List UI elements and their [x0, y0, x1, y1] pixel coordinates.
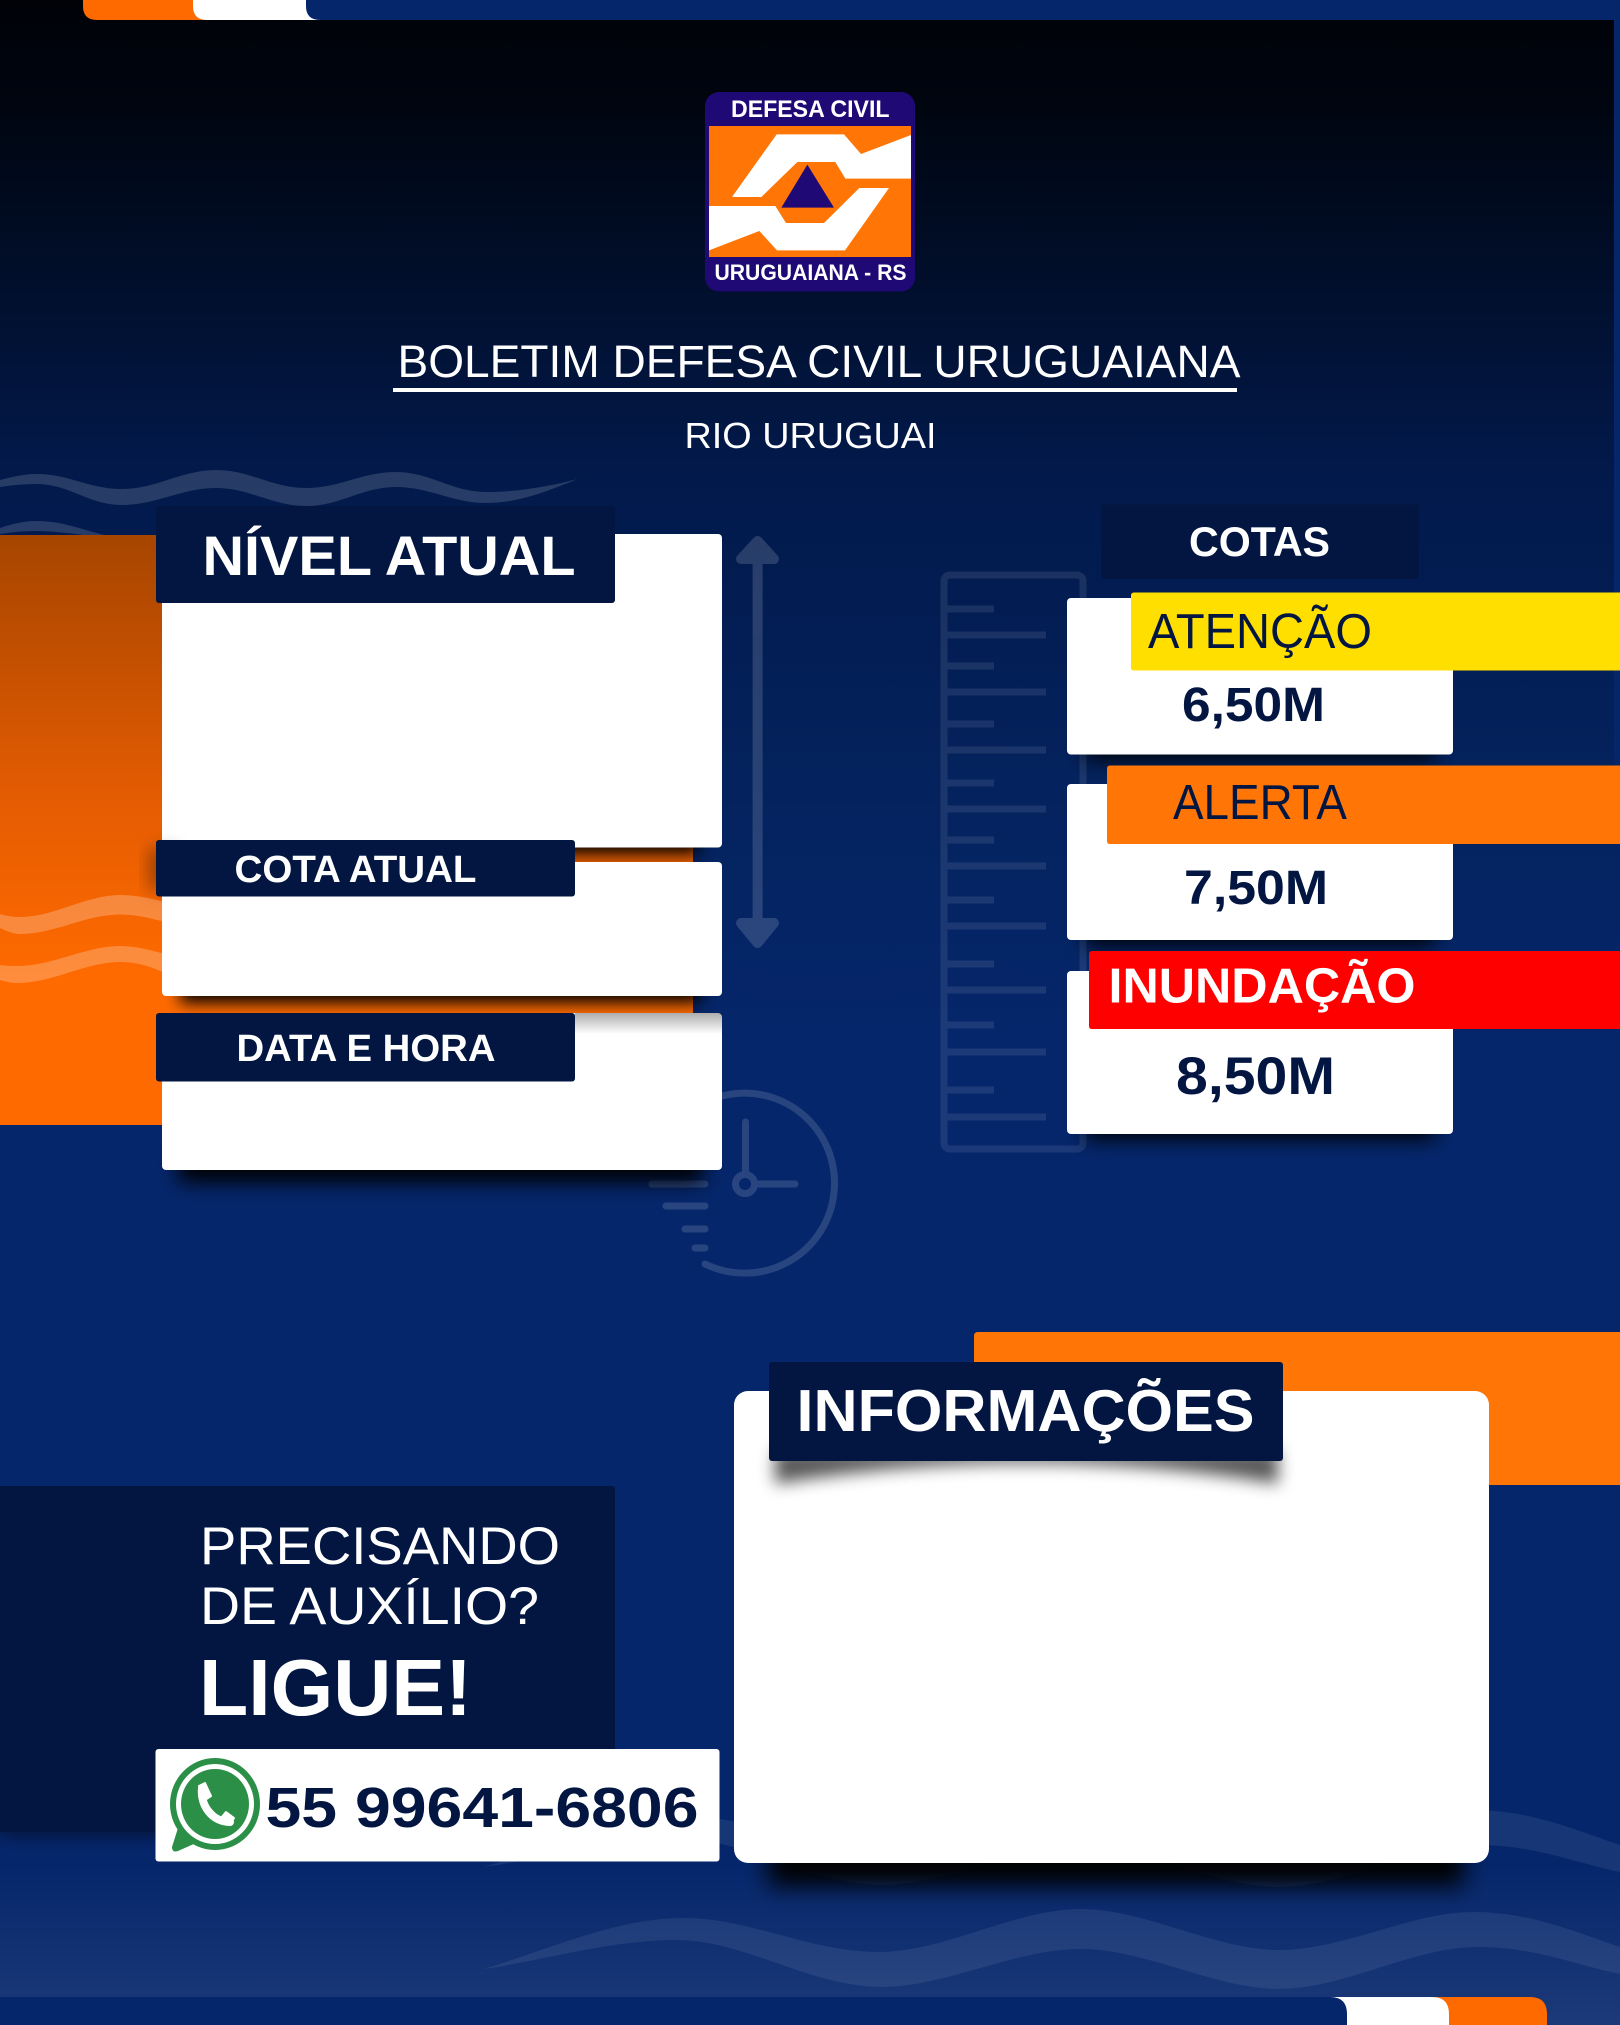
logo: defesa civil: URUGUAIANA - RS — [714, 260, 906, 285]
wave: on orange block — [0, 895, 165, 983]
heading: informações — [769, 1362, 1283, 1461]
orange block: informações — [974, 1332, 1620, 1485]
heading: nível atual — [156, 506, 615, 603]
heading: cotas: COTAS — [1189, 518, 1330, 565]
heading: cota atual: COTA ATUAL — [234, 849, 476, 891]
card: atenção — [1067, 592, 1620, 759]
card: atenção: 6,50M — [1182, 679, 1325, 732]
bottom stripe bar — [0, 1997, 1547, 2025]
card: inundação: INUNDAÇÃO — [1108, 960, 1416, 1014]
icon: ruler — [944, 575, 1083, 1149]
heading: data e hora: DATA E HORA — [236, 1028, 496, 1070]
icon: clock — [652, 1093, 835, 1273]
card: alerta: 7,50M — [1184, 862, 1328, 915]
panel: cota atual — [148, 840, 722, 1003]
card: atenção: ATENÇÃO — [1148, 605, 1372, 659]
icon: whatsapp — [170, 1758, 260, 1852]
heading: data e hora — [156, 1013, 575, 1082]
card: alerta — [1067, 766, 1620, 945]
wave: lower — [484, 1807, 1620, 1989]
panel: precisando de auxílio — [0, 1486, 615, 1832]
heading: cotas — [1101, 504, 1419, 579]
panel: nível atual — [156, 506, 722, 854]
top stripe bar — [83, 0, 1620, 20]
panel: precisando de auxílio: LIGUE! — [199, 1643, 472, 1732]
panel: data e hora — [156, 1013, 722, 1182]
panel: phone number — [156, 1749, 720, 1862]
card: inundação — [1067, 951, 1620, 1139]
panel: phone number: 55 99641-6806 — [266, 1776, 698, 1840]
panel: informações — [734, 1362, 1489, 1863]
icon: vertical double arrow — [741, 541, 774, 943]
logo: defesa civil: DEFESA CIVIL — [731, 96, 890, 123]
title: BOLETIM DEFESA CIVIL URUGUAIANA — [398, 336, 1240, 387]
wave: upper left — [0, 470, 578, 538]
heading: informações: INFORMAÇÕES — [796, 1378, 1254, 1444]
card: alerta: ALERTA — [1173, 776, 1347, 830]
heading: cota atual — [156, 840, 575, 896]
panel: precisando de auxílio: DE AUXÍLIO? — [200, 1577, 539, 1636]
logo: defesa civil — [705, 92, 915, 292]
subtitle: RIO URUGUAI — [684, 415, 936, 456]
shadow: panels lower — [0, 1820, 1464, 1886]
orange background block — [0, 535, 693, 1125]
panel: precisando de auxílio: PRECISANDO — [200, 1517, 560, 1576]
heading: nível atual: NÍVEL ATUAL — [202, 524, 576, 587]
card: inundação: 8,50M — [1176, 1047, 1335, 1106]
